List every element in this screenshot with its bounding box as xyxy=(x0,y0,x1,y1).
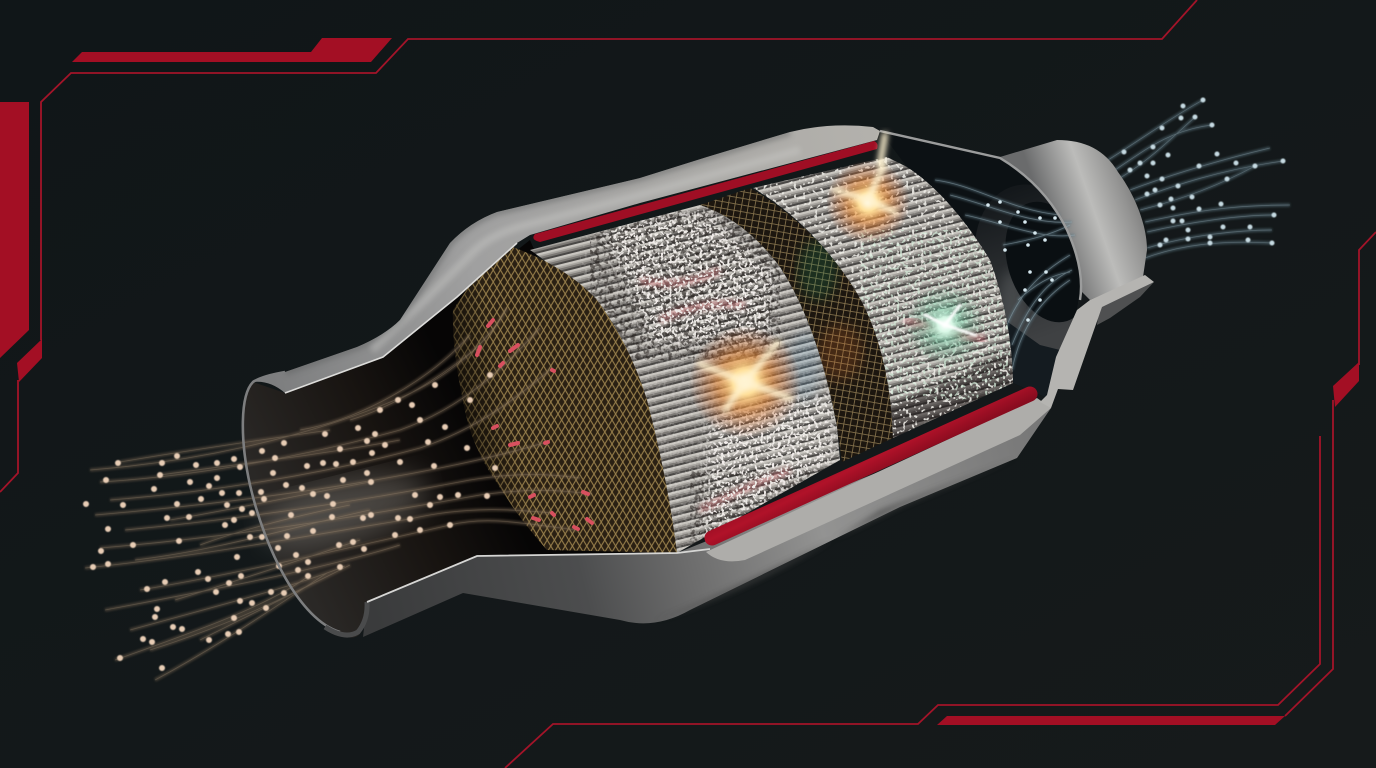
pink vein xyxy=(905,320,985,340)
tube body xyxy=(1000,140,1147,300)
outer right frame line xyxy=(1285,232,1376,716)
chamber strand haze xyxy=(935,180,1075,370)
green tint xyxy=(798,240,838,300)
blue tint xyxy=(789,330,821,400)
outlet particles xyxy=(1124,100,1283,245)
star arms xyxy=(700,342,790,410)
flare orange on first catalyst xyxy=(689,326,801,438)
dense speckles xyxy=(590,210,840,550)
lower bright band xyxy=(706,398,1051,561)
dark lower tint xyxy=(890,348,1013,438)
star arms xyxy=(835,135,895,212)
first catalyst ridged body xyxy=(530,205,840,552)
upper red strip xyxy=(533,141,878,242)
outlet exhaust streams, clean xyxy=(1108,100,1290,258)
inner bottom frame line xyxy=(505,436,1320,768)
upper shell body xyxy=(253,125,880,393)
lower shell xyxy=(363,398,1051,637)
inlet exhaust streams, dirty xyxy=(85,308,592,680)
green speckles xyxy=(860,230,1010,400)
large particles xyxy=(86,375,495,668)
glow xyxy=(689,326,801,438)
red particles xyxy=(477,320,592,529)
lower lip highlight xyxy=(367,549,710,602)
mist glow xyxy=(255,460,435,560)
cone highlight xyxy=(1000,270,1024,330)
dark grime xyxy=(590,210,780,360)
bottom red bar xyxy=(937,716,1285,725)
strand haze xyxy=(85,308,592,680)
top red bar xyxy=(72,38,392,62)
inner cone ring xyxy=(976,185,1080,350)
inlet strands xyxy=(85,308,592,680)
honeycomb second xyxy=(700,188,895,462)
speckle field xyxy=(580,205,845,555)
bottom chamber shadow xyxy=(1005,320,1060,398)
lower shell body xyxy=(363,403,1051,637)
outlet tube xyxy=(1000,140,1154,325)
flare orange on second catalyst xyxy=(826,135,910,244)
central highlight xyxy=(372,150,800,350)
outlet chamber xyxy=(976,202,1079,350)
lower shade xyxy=(650,458,1017,622)
bottom-right HUD frame xyxy=(505,232,1376,768)
cut edge line right xyxy=(880,131,1081,300)
second catalyst ridged body xyxy=(745,150,1020,445)
white speckles xyxy=(755,157,1013,436)
second catalyst honeycomb face xyxy=(700,188,895,462)
left shadow xyxy=(453,245,560,550)
orange tint xyxy=(818,324,862,380)
glow xyxy=(826,160,910,244)
dark throat xyxy=(1006,202,1080,322)
ridge texture xyxy=(530,205,840,552)
rim curl xyxy=(325,602,367,635)
lattice xyxy=(453,245,677,553)
outlet strand haze xyxy=(1108,100,1290,258)
inlet cavity xyxy=(243,240,677,638)
flange lower right xyxy=(1040,275,1154,408)
rim arc xyxy=(243,372,340,632)
left red wedge xyxy=(17,339,42,382)
inner bright edge xyxy=(285,243,517,393)
lower red strip xyxy=(712,394,1030,538)
upper shell xyxy=(253,125,880,393)
chamber particles xyxy=(988,202,1055,320)
top-left HUD frame xyxy=(0,0,1197,492)
chamber strands xyxy=(935,180,1075,370)
outer edge shade xyxy=(285,132,790,372)
ridge texture xyxy=(745,150,1020,445)
shell shading xyxy=(285,132,800,372)
right red wedge xyxy=(1333,362,1359,407)
lower tube shadow xyxy=(1097,282,1154,325)
left red block xyxy=(0,102,29,358)
lower grime xyxy=(690,470,820,546)
star arms xyxy=(925,305,975,335)
flare green on second catalyst xyxy=(905,285,985,365)
converter interior xyxy=(243,125,1128,638)
glow xyxy=(905,285,985,365)
top-left frame line xyxy=(0,0,1197,492)
outlet strands xyxy=(1108,100,1290,258)
inlet rim xyxy=(243,372,710,635)
first catalyst honeycomb face xyxy=(453,245,677,553)
pink veins xyxy=(640,270,790,510)
